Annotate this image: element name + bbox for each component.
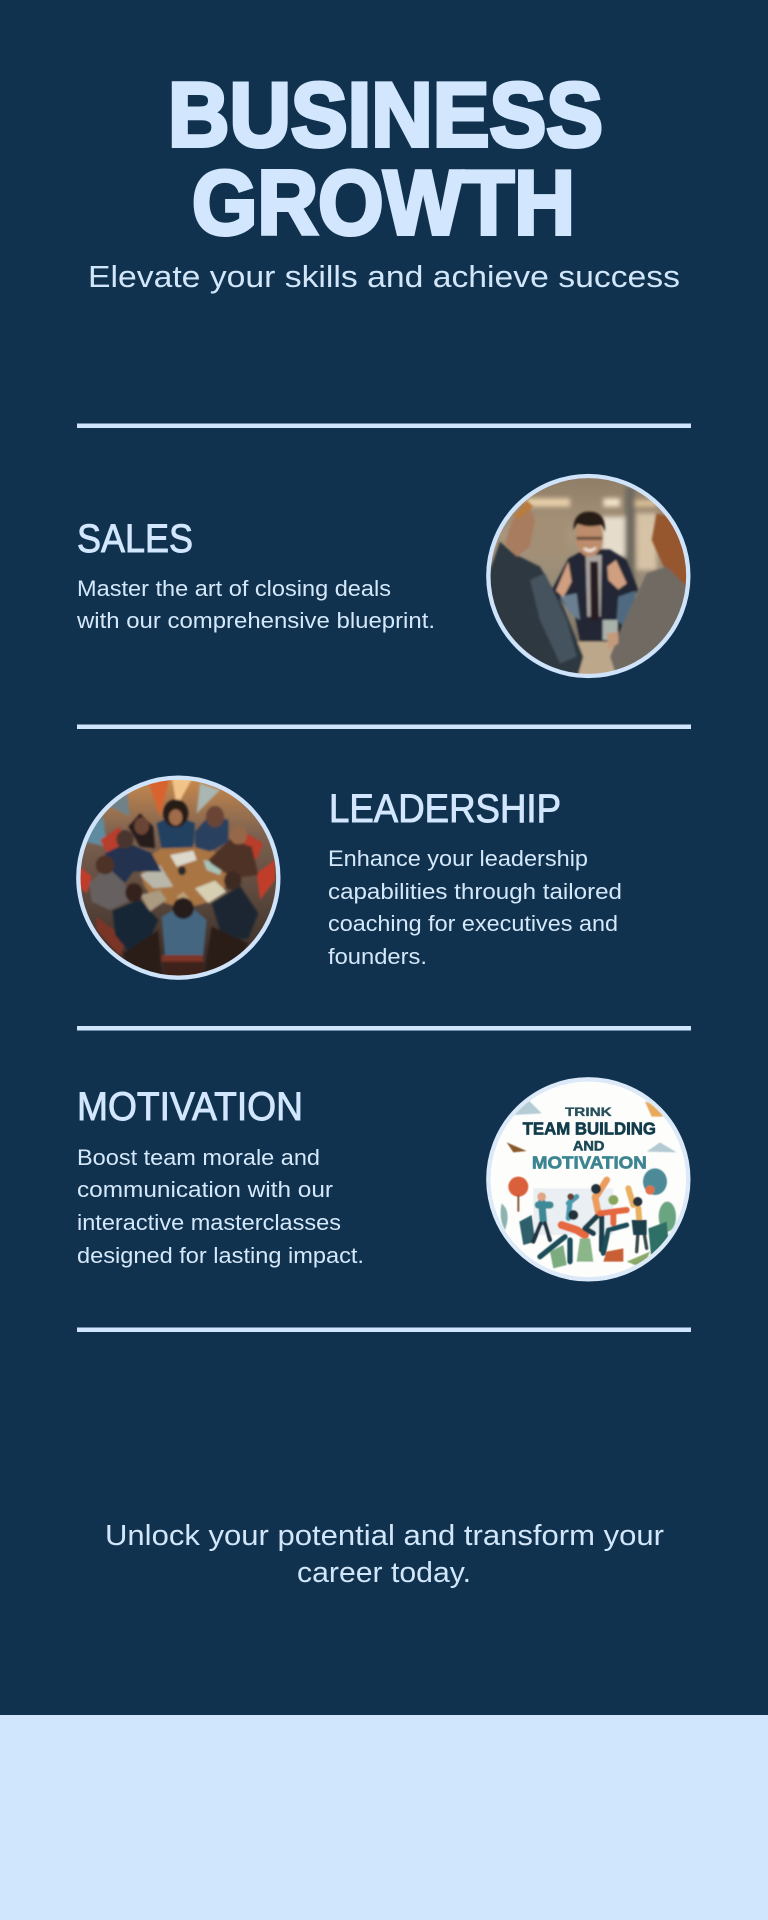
closing statement: career today. — [297, 1557, 471, 1589]
title — [168, 65, 603, 254]
text block: sales description: Master the art of closing deals — [77, 576, 391, 601]
text block: motivation description — [77, 1145, 364, 1268]
text block: motivation description: designed for lasting impact. — [77, 1243, 364, 1268]
image: leadership round table painting — [73, 770, 287, 983]
image: team building illustration — [488, 1079, 688, 1279]
image label text: TEAM BUILDING — [523, 1118, 656, 1138]
heading: leadership: LEADERSHIP — [329, 787, 561, 831]
closing statement — [105, 1520, 664, 1589]
image label text: AND — [573, 1138, 604, 1154]
image: sales meeting photo — [483, 470, 697, 683]
text block: sales description: with our comprehensive blueprint. — [76, 608, 435, 633]
panel: sales text — [76, 517, 435, 633]
title: GROWTH — [192, 153, 575, 254]
panel: motivation text — [77, 1085, 364, 1268]
closing statement: Unlock your potential and transform your — [105, 1520, 664, 1552]
footer band — [0, 1715, 768, 1920]
heading: sales: SALES — [77, 517, 193, 561]
subtitle: Elevate your skills and achieve success — [88, 259, 680, 294]
text block: leadership description: capabilities through tailored — [328, 879, 622, 904]
image label text: MOTIVATION — [532, 1153, 647, 1173]
title: BUSINESS — [168, 65, 603, 166]
image label text: TRINK — [565, 1105, 612, 1119]
text block: leadership description — [328, 846, 622, 969]
text block: motivation description: Boost team morale and — [77, 1145, 320, 1170]
heading: motivation: MOTIVATION — [77, 1085, 303, 1129]
text block: motivation description: communication with our — [77, 1177, 333, 1202]
text block: leadership description: founders. — [328, 944, 427, 969]
text block: leadership description: Enhance your leadership — [328, 846, 588, 871]
text block: leadership description: coaching for executives and — [328, 911, 618, 936]
panel: leadership text — [328, 787, 622, 969]
text block: motivation description: interactive masterclasses — [77, 1210, 341, 1235]
text block: sales description — [76, 576, 435, 633]
image label text — [523, 1105, 656, 1173]
